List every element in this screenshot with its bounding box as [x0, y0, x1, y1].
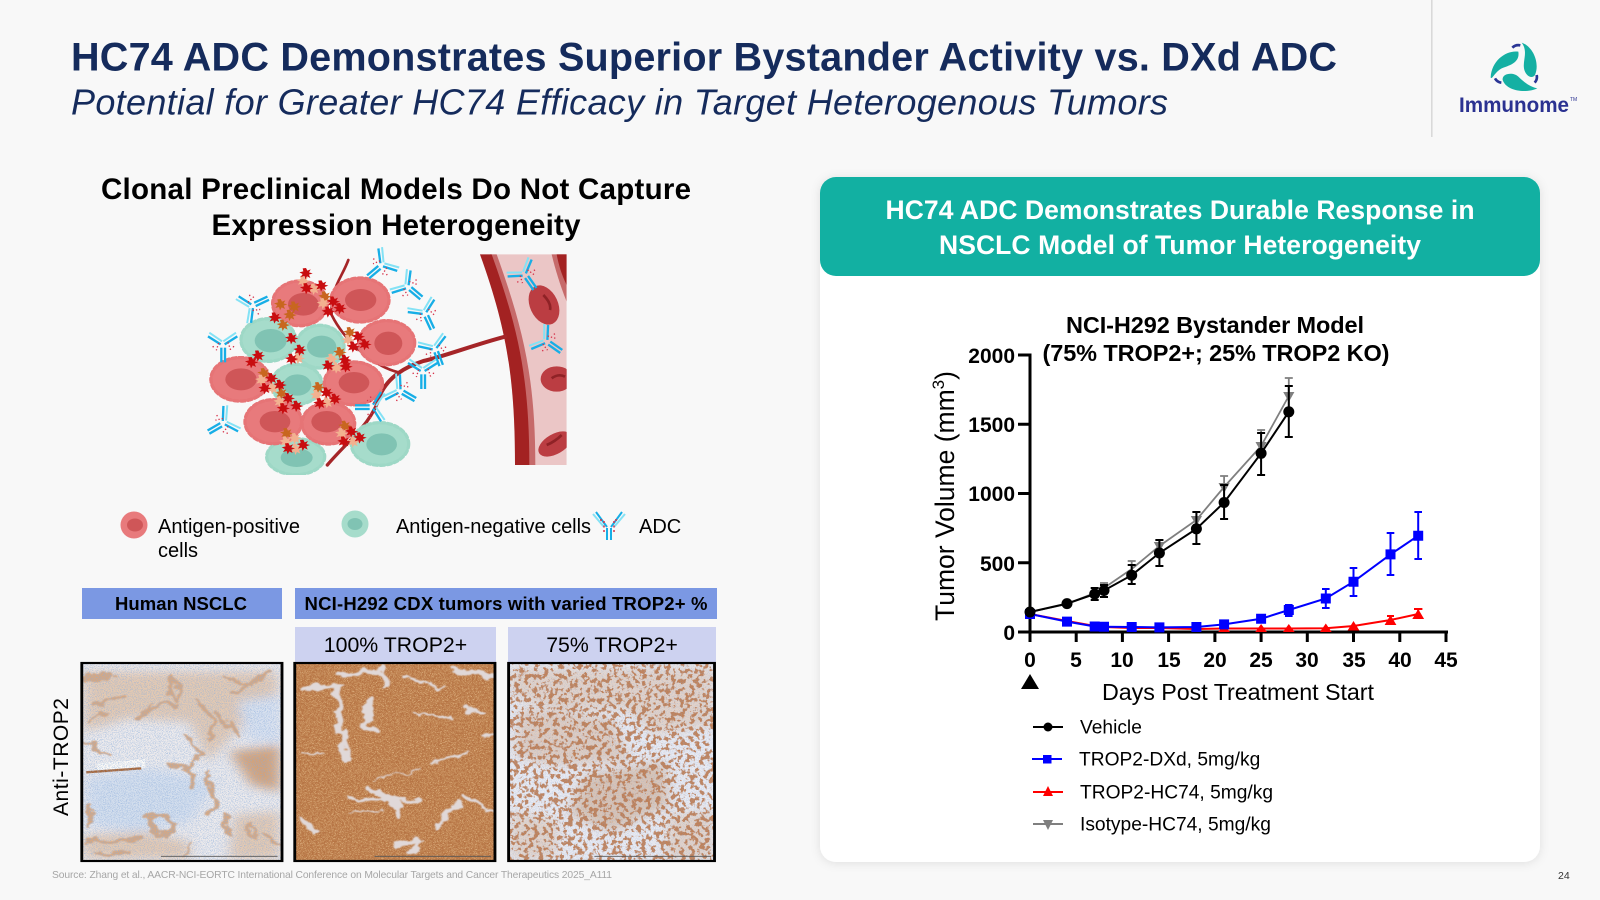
x-axis title: Days Post Treatment Start: [1102, 679, 1375, 705]
ADC label: ADC: [639, 516, 681, 538]
logo: Immunome: [1459, 43, 1577, 117]
trademark: TM: [1570, 97, 1577, 103]
header bar: NCI-H292 CDX tumors: NCI-H292 CDX tumors with varied TROP2+ %: [304, 593, 708, 614]
row label: Anti-TROP2: Anti-TROP2: [50, 698, 73, 816]
sub-header: 75% TROP2+: 75% TROP2+: [546, 633, 678, 657]
left panel heading: [101, 173, 691, 242]
blood vessel: [480, 254, 576, 465]
page number: 24: [1558, 870, 1570, 882]
source note: Source: Zhang et al., AACR-NCI-EORTC International Conference on Molecular Targets and Cancer Therapeutics 2025_A111: [52, 870, 612, 881]
x-axis labels: 45: [1434, 649, 1458, 672]
illustration: tumor cells, ADCs and blood vessel: [201, 246, 576, 475]
axes and ticks: [1018, 354, 1448, 642]
payload bursts: peach: [255, 276, 360, 455]
x-axis labels: 40: [1388, 649, 1412, 672]
chart title: NCI-H292 Bystander Model: [1066, 312, 1364, 338]
legend: Vehicle: [1033, 718, 1142, 738]
payload bursts: orange: [257, 291, 357, 439]
icon: antigen-negative cell: [342, 510, 368, 538]
icon: antigen-positive cell: [120, 512, 148, 538]
legend: cell types: [120, 510, 681, 562]
x-axis labels: 5: [1070, 649, 1082, 672]
y-axis title: Tumor Volume (mm: [930, 389, 960, 621]
x-axis labels: 20: [1203, 649, 1227, 672]
subtitle: Potential for Greater HC74 Efficacy in Target Heterogenous Tumors: [71, 82, 1168, 122]
payload bursts: red: [245, 268, 372, 454]
series: TROP2-DXd: [1025, 512, 1423, 632]
legend: TROP2-HC74: TROP2-HC74, 5mg/kg: [1080, 782, 1273, 804]
header bar: NCI-H292 CDX tumors: [295, 588, 717, 619]
x-axis labels: 25: [1249, 649, 1273, 672]
panel header: HC74 ADC Demonstrates Durable Response in: [886, 195, 1474, 225]
y-axis labels: 500: [980, 553, 1015, 576]
logo wordmark: Immunome: [1459, 94, 1569, 117]
antigen-negative label: Antigen-negative cells: [396, 516, 591, 538]
x-axis labels: 0: [1024, 649, 1036, 672]
series: Vehicle: [1024, 386, 1294, 618]
y-axis labels: 1500: [968, 414, 1015, 437]
panel: durable response: [820, 177, 1540, 862]
y-axis title: 3: [929, 380, 948, 389]
chart title: (75% TROP2+; 25% TROP2 KO): [1042, 340, 1390, 366]
micrograph: 100% TROP2+: [295, 663, 495, 861]
antigen-positive label: cells: [158, 540, 198, 562]
y-axis labels: 2000: [968, 345, 1015, 368]
chart legend: [1032, 718, 1273, 836]
legend: TROP2-DXd: TROP2-DXd, 5mg/kg: [1079, 750, 1260, 770]
positive nuclei overlapping: [225, 368, 369, 432]
sub-header: 100% TROP2+: [295, 627, 496, 663]
y-axis title: ): [930, 371, 960, 380]
panel card: [820, 177, 1540, 862]
x-axis labels: 10: [1110, 649, 1134, 672]
sub-header: 100% TROP2+: 100% TROP2+: [324, 633, 467, 657]
chart title: [1042, 312, 1390, 366]
antigen-positive cells: [211, 278, 415, 405]
antigen-negative cells: [241, 319, 409, 475]
antigen-negative nuclei: [255, 329, 397, 467]
x-axis labels: [1024, 649, 1458, 672]
y-axis labels: 0: [1003, 622, 1015, 645]
x-axis labels: 30: [1295, 649, 1319, 672]
y-axis labels: 1000: [968, 483, 1015, 506]
antigen-positive label: Antigen-positive: [158, 516, 300, 538]
title: HC74 ADC Demonstrates Superior Bystander Activity vs. DXd ADC: [71, 36, 1337, 80]
capillaries: [327, 260, 505, 465]
icon: ADC: [593, 512, 625, 540]
x-axis labels: 35: [1342, 649, 1366, 672]
panel header: [820, 177, 1540, 276]
antibody-drug conjugates: [201, 246, 569, 444]
legend: Isotype-HC74: Isotype-HC74, 5mg/kg: [1080, 814, 1271, 836]
micrograph: 75% TROP2+: [509, 663, 715, 861]
header bar: Human NSCLC: [82, 588, 282, 619]
y-axis labels: [968, 345, 1015, 645]
micrograph: human NSCLC: [82, 663, 282, 861]
line chart: tumor volume: [929, 345, 1458, 836]
series: Isotype-HC74: [1030, 378, 1294, 612]
antigen-positive nuclei: [288, 289, 402, 355]
logo mark: [1491, 43, 1537, 91]
legend: Vehicle: Vehicle: [1080, 718, 1142, 738]
header bar: Human NSCLC: Human NSCLC: [115, 593, 247, 614]
antigen-positive label: [158, 516, 300, 562]
sub-header: 75% TROP2+: [508, 627, 716, 663]
positive cells overlapping: [211, 358, 382, 444]
left panel heading: Clonal Preclinical Models Do Not Capture: [101, 173, 691, 206]
treatment marker: [1021, 674, 1039, 689]
x-axis labels: 15: [1157, 649, 1181, 672]
left panel heading: Expression Heterogeneity: [212, 209, 581, 242]
panel header: NSCLC Model of Tumor Heterogeneity: [939, 230, 1421, 260]
header divider: [1431, 0, 1433, 137]
series: TROP2-HC74: [1030, 609, 1424, 632]
